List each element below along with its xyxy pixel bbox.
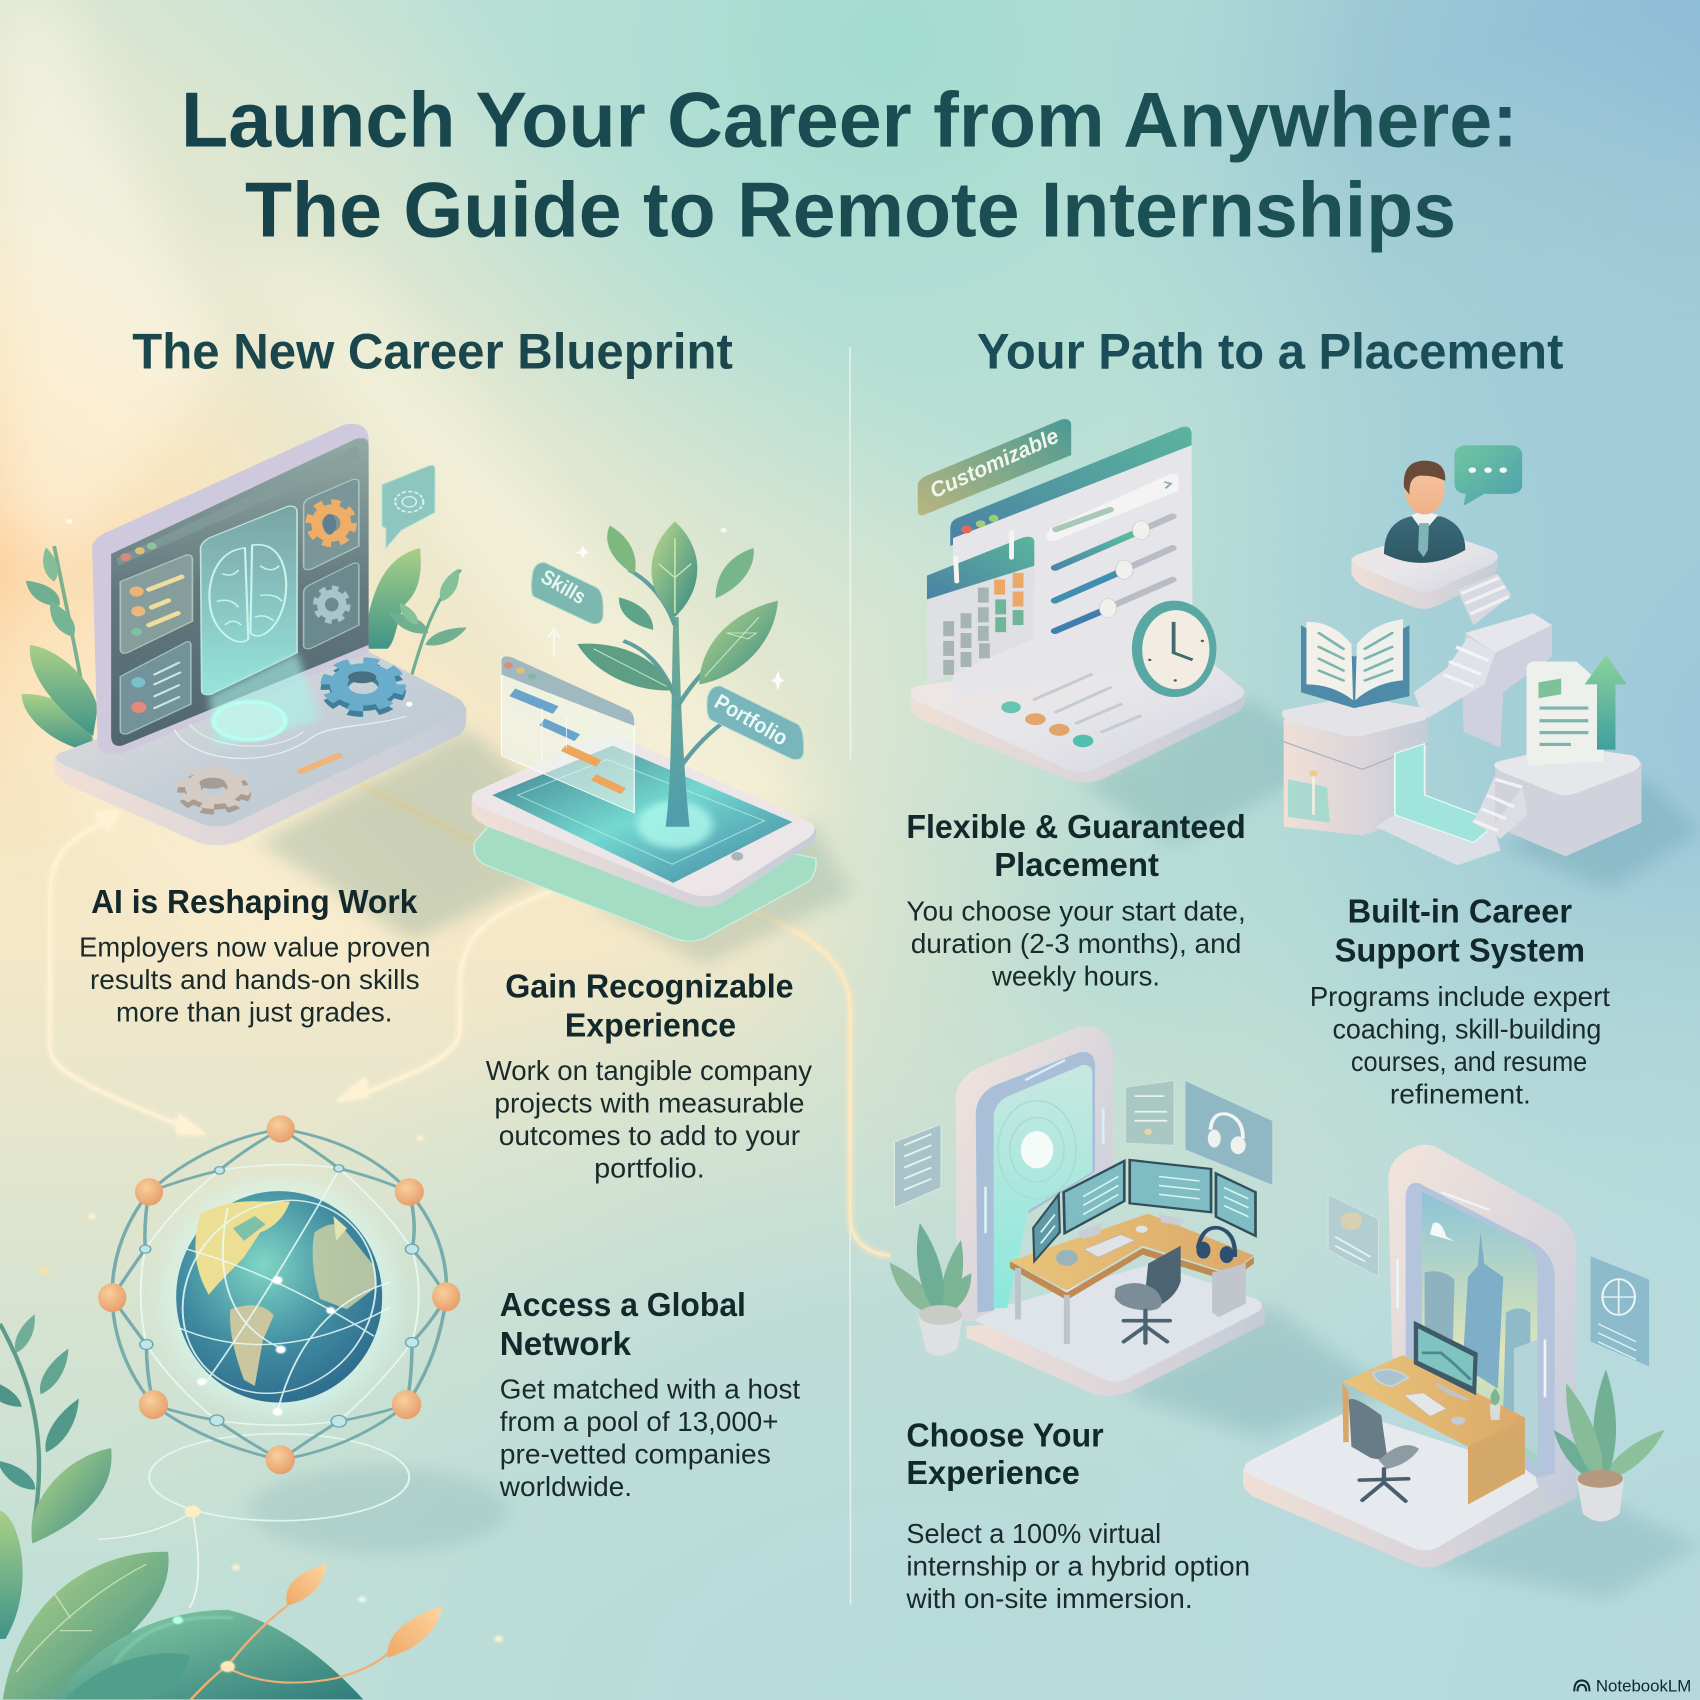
text: AI is Reshaping Work: results and hands-on skills	[90, 963, 420, 995]
text: Built-in Career Support System	[1310, 894, 1610, 1110]
text: Choose Your Experience: with on-site immersion.	[905, 1582, 1193, 1614]
illustration: globe network	[98, 1115, 510, 1554]
title	[181, 75, 1518, 253]
text: AI is Reshaping Work: Employers now value proven	[79, 930, 430, 962]
search bar	[1046, 473, 1179, 541]
text: Choose Your Experience	[905, 1417, 1250, 1614]
text: Choose Your Experience: internship or a hybrid option	[906, 1549, 1250, 1581]
text: Gain Recognizable Experience: projects with measurable	[494, 1086, 804, 1118]
orbit lines	[141, 1165, 419, 1425]
text: Flexible & Guaranteed Placement	[906, 809, 1246, 992]
plant behind monitor left	[19, 546, 98, 752]
text: Built-in Career Support System: Support System	[1335, 933, 1585, 970]
base	[1243, 1469, 1576, 1568]
sapling	[577, 522, 778, 827]
potted plant	[1546, 1369, 1672, 1521]
clock	[1132, 601, 1216, 697]
text: Built-in Career Support System: Built-in Career	[1348, 894, 1572, 931]
illustration: AI monitor on platform	[19, 424, 607, 941]
potted plant	[881, 1221, 980, 1356]
stairs and bridge	[1414, 574, 1552, 748]
connector lines and arrows	[50, 783, 889, 1255]
monitor	[1414, 1321, 1478, 1400]
orange nodes	[98, 1115, 460, 1474]
open book	[1301, 619, 1409, 708]
text: AI is Reshaping Work: AI is Reshaping Work	[91, 884, 418, 921]
dashboard chips	[1001, 674, 1140, 747]
icon: up arrow	[1585, 655, 1627, 750]
text: Built-in Career Support System: refinement.	[1390, 1078, 1531, 1110]
globe sphere	[160, 1179, 398, 1415]
text: Choose Your Experience: Select a 100% virtual	[906, 1517, 1161, 1549]
text: Gain Recognizable Experience: portfolio.	[594, 1151, 705, 1183]
water channel	[1376, 815, 1501, 865]
left block	[1284, 696, 1427, 835]
window	[953, 427, 1193, 698]
arch	[1388, 1145, 1576, 1500]
person	[1384, 461, 1465, 563]
calendar	[927, 532, 1034, 684]
illustration: career support staircase	[1282, 445, 1700, 890]
headphones on desk	[1198, 1228, 1235, 1261]
watermark: NotebookLM: NotebookLM	[1596, 1677, 1691, 1695]
text: Choose Your Experience: Choose Your	[906, 1417, 1104, 1454]
plant behind monitor right	[363, 548, 471, 674]
tag: Skills	[532, 563, 603, 624]
right block	[1495, 761, 1641, 856]
text: AI is Reshaping Work	[79, 884, 430, 1027]
monitor	[92, 424, 369, 755]
grey gear	[182, 768, 247, 812]
green tablet base	[474, 823, 816, 941]
chair	[1115, 1246, 1181, 1343]
sliders	[1055, 516, 1173, 631]
illustration: customizable calendar dashboard	[911, 419, 1338, 846]
illustration: tablet with sapling	[472, 522, 850, 965]
heading: Your Path to a Placement: Your Path to a Placement	[977, 324, 1563, 380]
tag: Customizable: Customizable	[926, 423, 1062, 503]
text: Flexible & Guaranteed Placement: Flexible & Guaranteed	[906, 809, 1246, 846]
tag: Skills: Skills	[537, 565, 590, 609]
title: Launch Your Career from Anywhere:	[181, 75, 1518, 163]
text: Built-in Career Support System: coaching, skill-building	[1332, 1013, 1601, 1045]
text: Flexible & Guaranteed Placement: duration (2-3 months), and	[911, 927, 1241, 959]
icon: speech bubble	[382, 465, 435, 548]
floating cards	[894, 1081, 1273, 1208]
document	[1527, 661, 1605, 765]
text: Access a Global Network: from a pool of 13,000+	[500, 1405, 778, 1437]
text: Gain Recognizable Experience: Experience	[565, 1007, 736, 1044]
desk	[1010, 1214, 1254, 1344]
title: The Guide to Remote Internships	[245, 165, 1456, 253]
arch	[956, 1026, 1113, 1321]
platform	[911, 692, 1246, 782]
text: Access a Global Network: Network	[500, 1326, 631, 1363]
text: Flexible & Guaranteed Placement: You choose your start date,	[906, 894, 1246, 926]
base	[967, 1304, 1265, 1396]
network mesh	[112, 1129, 446, 1460]
text: Gain Recognizable Experience: outcomes to add to your	[499, 1119, 800, 1151]
text: Choose Your Experience: Experience	[906, 1455, 1080, 1492]
text: Gain Recognizable Experience: Gain Recognizable	[505, 968, 794, 1005]
text: Access a Global Network: pre-vetted companies	[500, 1438, 771, 1470]
platform	[54, 706, 466, 845]
text: Gain Recognizable Experience	[486, 968, 813, 1183]
text: Built-in Career Support System: Programs include expert	[1310, 980, 1610, 1012]
text: Access a Global Network: Get matched with a host	[500, 1373, 800, 1405]
city skyline	[1425, 1222, 1537, 1456]
text: Flexible & Guaranteed Placement: weekly hours.	[991, 960, 1160, 992]
text: Access a Global Network: Access a Global	[500, 1287, 746, 1324]
hologram brain	[201, 506, 297, 695]
floating cards	[1328, 1194, 1650, 1367]
tag: Portfolio: Portfolio	[710, 689, 792, 751]
text: Access a Global Network	[499, 1287, 800, 1502]
text: Access a Global Network: worldwide.	[499, 1470, 632, 1502]
text: AI is Reshaping Work: more than just grades.	[116, 995, 392, 1027]
chat bubble	[1454, 445, 1522, 506]
heading: The New Career Blueprint: The New Career Blueprint	[132, 324, 733, 380]
illustration: hybrid desk with city window	[1243, 1145, 1700, 1598]
floating window	[501, 656, 634, 813]
desk	[1342, 1355, 1525, 1447]
monitors	[1033, 1160, 1255, 1266]
top platform	[1351, 554, 1498, 609]
divider	[849, 347, 852, 1605]
text: Flexible & Guaranteed Placement: Placement	[994, 847, 1159, 884]
tablet	[472, 799, 816, 907]
blue gear	[326, 661, 401, 714]
text: Built-in Career Support System: courses, and resume	[1351, 1045, 1587, 1077]
text: Gain Recognizable Experience: Work on tangible company	[486, 1054, 813, 1086]
chair	[1349, 1399, 1419, 1501]
hologram beam	[209, 653, 320, 748]
illustration: bottom-left foliage	[0, 1135, 503, 1699]
illustration: virtual desk	[881, 1026, 1392, 1438]
